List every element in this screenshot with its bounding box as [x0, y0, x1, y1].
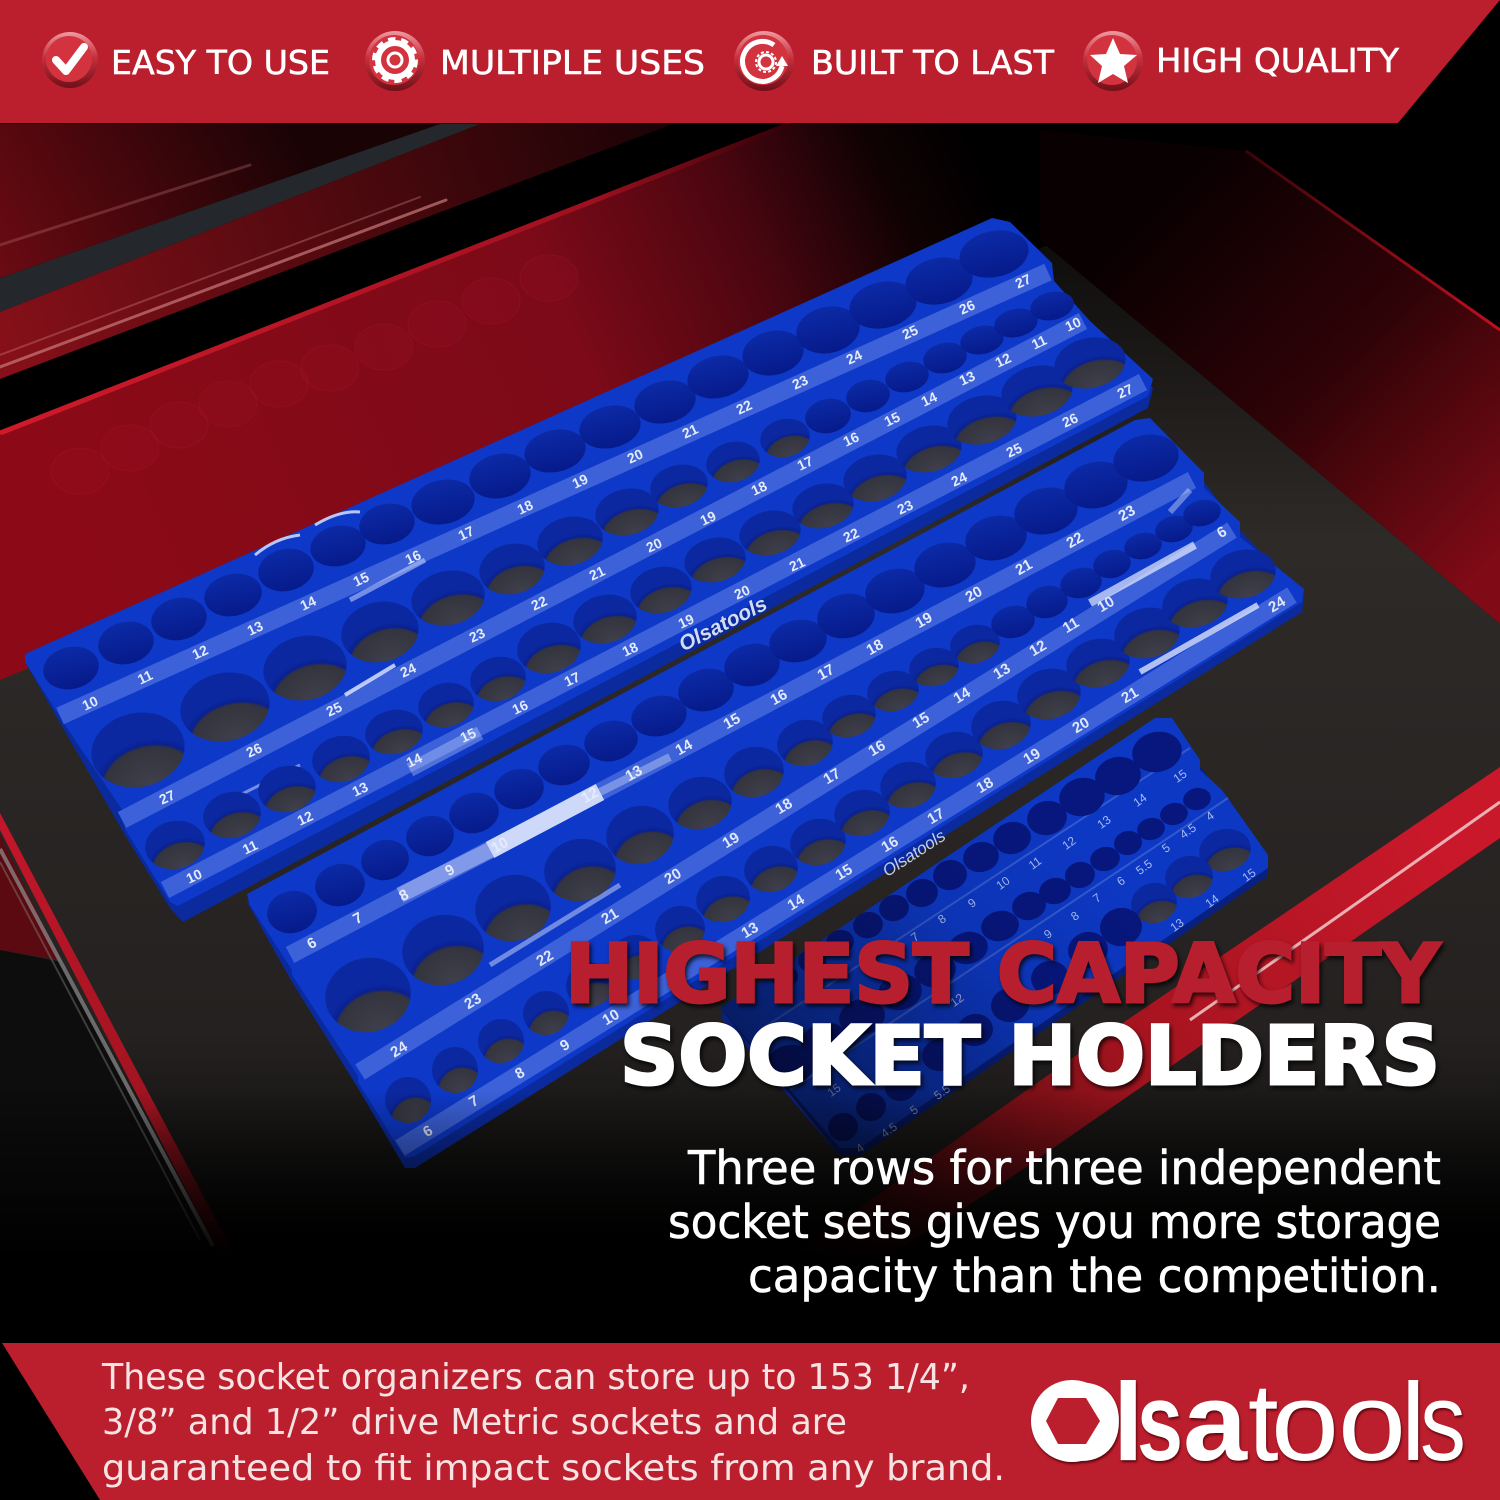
feature: multiple uses: [365, 31, 705, 91]
red drawer back wall: [0, 124, 1060, 680]
tray C size numbers: 5.5: [931, 1081, 953, 1103]
headline line 1: HIGHEST CAPACITY: [565, 928, 1441, 1022]
tray B size numbers: 13: [738, 919, 762, 942]
tray A size numbers: 13: [350, 778, 371, 800]
tray C size numbers: 5.5: [1133, 856, 1155, 878]
tray A size numbers: 26: [244, 739, 265, 761]
tray A size numbers: 20: [625, 445, 646, 467]
logo: Olsatools: s: [1420, 1361, 1466, 1484]
tray A row 3 sockets: [141, 331, 1130, 875]
tray B size numbers: 20: [661, 865, 685, 888]
tray A size numbers: 25: [324, 698, 345, 720]
tray C size numbers: 8: [935, 911, 949, 927]
banner background: [0, 0, 1500, 123]
tray C size numbers: 15: [1171, 766, 1190, 786]
tray C row 2 sockets: [761, 785, 1213, 1090]
left front drawer rail: [0, 813, 240, 1265]
tray A size numbers: 24: [949, 468, 970, 490]
tray B size numbers: 16: [768, 686, 790, 709]
tray C top face: [720, 718, 1268, 1148]
tray A size numbers: 17: [795, 452, 816, 474]
tray B size numbers: 17: [815, 661, 837, 684]
tray C size numbers: 8: [1068, 908, 1082, 924]
tray B size numbers: 22: [533, 947, 557, 970]
tray B size numbers: 23: [461, 990, 485, 1013]
tray B size numbers: 19: [913, 609, 935, 632]
tray A size numbers: 15: [882, 408, 903, 430]
left rail grey stripes: [0, 849, 213, 1246]
banner text: guaranteed to fit impact sockets from any brand.: [102, 1448, 1005, 1489]
tray C size numbers: 4.5: [878, 1119, 900, 1141]
tray B size numbers: 16: [878, 833, 902, 856]
tray A size numbers: 23: [895, 496, 916, 518]
tray B size numbers: 20: [1069, 714, 1093, 737]
tray A size numbers: 21: [587, 562, 608, 584]
tray B size numbers: 13: [990, 660, 1014, 683]
tray C size numbers: 15: [1240, 865, 1259, 885]
tray B size numbers: 18: [973, 774, 997, 797]
tray A size numbers: 20: [644, 534, 665, 556]
socket tray A: upper organizer: [25, 218, 1153, 922]
logo: Olsatools: o: [1271, 1361, 1339, 1484]
label: multiple uses: MULTIPLE USES: [440, 43, 705, 82]
right drawer wall: [1040, 130, 1500, 624]
tray A size numbers: 25: [1004, 439, 1025, 461]
banner background: [2, 1343, 1500, 1500]
tray B size numbers: 24: [388, 1038, 411, 1061]
wall top rim: [0, 124, 790, 433]
tray A size numbers: 19: [698, 507, 719, 529]
tray B size numbers: 11: [1060, 614, 1082, 637]
logo: Olsatools: o: [1338, 1361, 1406, 1484]
tray B size numbers: 20: [963, 583, 985, 606]
tray B size numbers: 14: [951, 684, 974, 707]
magnetic imprint marks on wall: [51, 255, 578, 494]
tray A top face: [25, 218, 1153, 906]
tray C row dividers: [760, 748, 1228, 1090]
tray B body edge: [247, 426, 1304, 1168]
tray A size numbers: 22: [734, 396, 755, 418]
tray B size numbers: 14: [673, 736, 696, 759]
tray B row 3 sockets: [381, 544, 1280, 1127]
feature: easy to use: [42, 32, 330, 88]
lower-left red wedge: [0, 835, 60, 960]
tray C size numbers: 12: [948, 990, 967, 1010]
label: easy to use: EASY TO USE: [111, 43, 330, 82]
tray B size numbers: 15: [721, 710, 743, 733]
tray B size numbers: 23: [1116, 502, 1138, 525]
tray B size numbers: 19: [1020, 745, 1044, 768]
logo: Olsatools: a: [1183, 1361, 1248, 1484]
tray B size numbers: 24: [1266, 593, 1289, 616]
tray B size numbers: 10: [599, 1006, 623, 1029]
tray A size numbers: 14: [404, 749, 425, 771]
tray C size numbers: 10: [994, 873, 1013, 893]
tray A size numbers: 25: [900, 321, 921, 343]
icon: star: [1083, 31, 1143, 91]
tray A size numbers: 14: [919, 388, 940, 410]
tray A size numbers: 17: [456, 522, 477, 544]
tray B top face: [247, 418, 1304, 1158]
tray C size numbers: 14: [1203, 891, 1222, 911]
logo: Olsatools: t: [1248, 1361, 1279, 1484]
tray B size numbers: 7: [466, 1092, 482, 1111]
tray B row 2 sockets: [318, 496, 1223, 1040]
tray A size numbers: 18: [749, 477, 770, 499]
tray C size numbers: 15: [825, 1080, 844, 1100]
tray C size numbers: 13: [1095, 812, 1114, 832]
tray C size numbers: 5: [1159, 840, 1173, 856]
tray B size numbers: 9: [557, 1036, 573, 1055]
tray A size numbers: 12: [190, 641, 211, 663]
tray B size numbers: 14: [785, 891, 808, 914]
logo: Olsatools: l: [1401, 1361, 1425, 1484]
right front drawer rail: [700, 767, 1500, 1320]
tray B size numbers: [304, 502, 1289, 1141]
tray A size numbers: 10: [80, 692, 101, 714]
tray A size numbers: 27: [1115, 380, 1136, 402]
tray C size numbers: [825, 766, 1259, 1156]
socket tray C: small organizer: [720, 718, 1268, 1156]
tray B number strips: [290, 480, 1292, 1148]
tray B size numbers: 18: [772, 795, 796, 818]
tray A size numbers: 23: [790, 371, 811, 393]
tray B size numbers: 10: [1094, 593, 1118, 616]
tray A size numbers: 18: [620, 638, 641, 660]
tray B size numbers: 12: [1026, 637, 1050, 660]
tray A size numbers: 26: [1060, 409, 1081, 431]
tray A size numbers: 21: [787, 553, 808, 575]
banner text: 3/8” and 1/2” drive Metric sockets and are: [102, 1402, 847, 1443]
tray A size numbers: 16: [403, 546, 424, 568]
tray B size numbers: 15: [832, 861, 856, 884]
feature: built to last: [734, 31, 1055, 91]
drawer floor foam: [0, 240, 1500, 1340]
tray B size numbers: 13: [623, 762, 645, 785]
tray A row 1 sockets: [39, 224, 1033, 694]
tray C shading: [720, 718, 1268, 1156]
tray C size numbers: 11: [1026, 854, 1044, 872]
tray A size numbers: 20: [732, 581, 753, 603]
lower vignette: [0, 1090, 1500, 1350]
tray C size numbers: 6: [1114, 873, 1128, 889]
tray B size numbers: 21: [1118, 684, 1142, 707]
tray A size numbers: 21: [680, 420, 701, 442]
tray A size numbers: 10: [1063, 313, 1084, 335]
tray C size numbers: 4: [1203, 808, 1217, 824]
tray A size numbers: 13: [245, 617, 266, 639]
tray B size numbers: 8: [396, 886, 412, 905]
logo: Olsatools: l: [1113, 1361, 1144, 1484]
tray A size numbers: 10: [184, 865, 205, 887]
tray C row 3 sockets: [825, 824, 1255, 1144]
logo: Olsatools: O: [1038, 1361, 1124, 1484]
upper drawer front: [0, 124, 440, 278]
tray A size numbers: 12: [295, 807, 316, 829]
logo: Olsatools: [1031, 1361, 1466, 1484]
label: built to last: BUILT TO LAST: [811, 43, 1055, 82]
tray C size numbers: 14: [1131, 790, 1150, 810]
bottom banner: [2, 1343, 1500, 1500]
tray B size numbers: 6: [1214, 523, 1230, 542]
tray C size numbers: 9: [965, 895, 979, 911]
lower-left dark cabinet: [0, 950, 215, 1250]
tray A size numbers: 15: [458, 724, 479, 746]
Olsatools tray B mark: Olsatools: [879, 826, 949, 881]
tray C size numbers: 12: [1060, 833, 1079, 853]
tray A size numbers: 27: [157, 786, 178, 808]
tray A size numbers: 19: [570, 470, 591, 492]
tray A size numbers: 13: [957, 367, 978, 389]
tray B size numbers: 9: [442, 861, 458, 880]
tray A size numbers: 27: [1013, 270, 1034, 292]
tray A size numbers: 11: [135, 667, 155, 687]
tray A size numbers: 26: [957, 296, 978, 318]
tray B size numbers: 19: [719, 829, 743, 852]
tray B size numbers: 18: [864, 636, 886, 659]
glare on tray A: [240, 512, 480, 795]
right wall rim: [1246, 151, 1500, 330]
tray A size numbers: 16: [510, 696, 531, 718]
tray B size numbers: 17: [924, 805, 948, 828]
tray B size numbers: 8: [512, 1064, 528, 1083]
tray A number strips: [60, 272, 1143, 890]
tray B size numbers: 7: [350, 909, 366, 928]
tray A size numbers: 23: [467, 624, 488, 646]
tray B size numbers: 16: [865, 737, 889, 760]
tray C row 1 sockets: [770, 727, 1186, 990]
tray A size numbers: 16: [841, 428, 862, 450]
banner text: These socket organizers can store up to 153 1/4”,: [101, 1357, 970, 1398]
glare on tray B: [400, 490, 1258, 965]
headline: [565, 928, 1441, 1104]
tray C size numbers: 9: [1041, 926, 1055, 942]
description paragraph: capacity than the competition.: [748, 1249, 1441, 1303]
tray A size numbers: 11: [1029, 332, 1049, 352]
tray B size numbers: 6: [420, 1122, 436, 1141]
tray B size numbers: 22: [1064, 529, 1086, 552]
tray B size numbers: 15: [909, 709, 933, 732]
tray B row 1 sockets: [263, 429, 1183, 938]
description paragraph: Three rows for three independent: [687, 1141, 1441, 1195]
headline line 2: SOCKET HOLDERS: [620, 1010, 1440, 1104]
tray B size numbers: 17: [820, 765, 844, 788]
tray A size numbers: 18: [515, 496, 536, 518]
label: high quality: HIGH QUALITY: [1156, 41, 1400, 80]
Olsatools tray A mark: Olsatools: [675, 592, 771, 656]
tray A size numbers: 14: [298, 592, 319, 614]
logo: Olsatools: s: [1137, 1361, 1183, 1484]
tray A size numbers: 24: [844, 346, 865, 368]
tray B size numbers: 21: [598, 905, 622, 928]
tray A size numbers: 22: [529, 592, 550, 614]
tray C size numbers: 7: [908, 929, 922, 945]
rail highlight: [1190, 802, 1500, 1020]
tray C size numbers: 4: [853, 1140, 867, 1156]
tray A size numbers: 22: [841, 524, 862, 546]
tray B size numbers: 6: [304, 934, 320, 953]
red drawer band: [0, 124, 673, 379]
tray A size numbers: 11: [240, 837, 260, 857]
tray A size numbers: 24: [398, 659, 419, 681]
icon: gear: [365, 31, 425, 91]
tray A size numbers: 19: [676, 610, 697, 632]
drawer band highlights: [0, 165, 446, 367]
tray A size numbers: 12: [993, 349, 1014, 371]
top banner: [0, 0, 1500, 123]
tray A size numbers: 17: [562, 668, 583, 690]
tray C body edge: [720, 724, 1268, 1156]
tray B size numbers: 10: [489, 834, 511, 857]
tray C size numbers: 7: [1090, 890, 1104, 906]
description paragraph: socket sets gives you more storage: [668, 1195, 1441, 1249]
grey drawer gasket: [0, 124, 480, 312]
tray A size numbers: [80, 270, 1136, 887]
tray B size numbers: 21: [1013, 556, 1035, 579]
description paragraph: [668, 1141, 1441, 1303]
tray A size numbers: 15: [351, 568, 372, 590]
icon: cycle gear: [734, 31, 794, 91]
tray C size numbers: 4.5: [1177, 820, 1199, 842]
icon: check mark: [42, 32, 98, 88]
feature: high quality: [1083, 31, 1400, 91]
tray A row 2 sockets: [84, 288, 1076, 796]
tray C size numbers: 13: [1168, 915, 1187, 935]
tray B size numbers: 12: [579, 784, 601, 807]
socket tray B: middle organizer: [247, 418, 1304, 1168]
tray A body edge: [25, 224, 1153, 922]
tray C size numbers: 5: [907, 1102, 921, 1118]
banner text: [101, 1357, 1005, 1489]
